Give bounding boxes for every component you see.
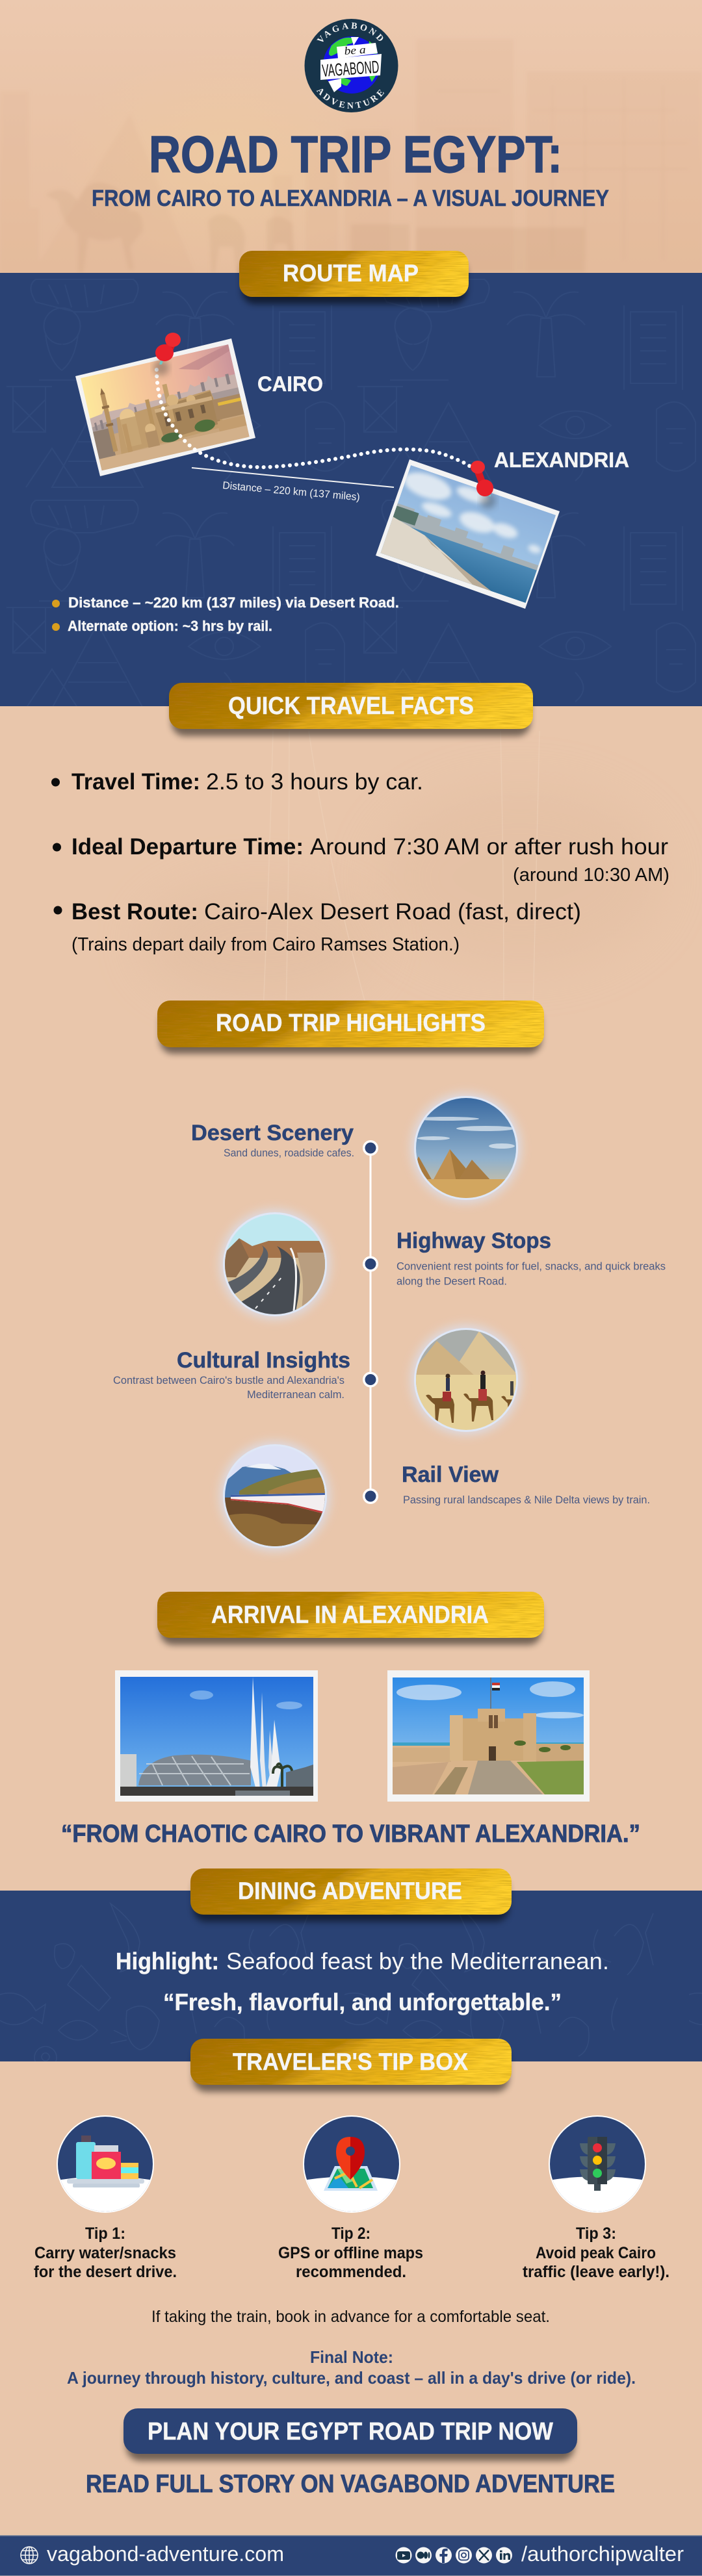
final note: A journey through history, culture, and coast – all in a day's drive (or ride). (67, 2368, 636, 2388)
subtitle: FROM CAIRO TO ALEXANDRIA – A VISUAL JOURNEY (92, 186, 609, 211)
fact: departure time: (around 10:30 AM) (513, 865, 670, 886)
icon: traffic light (549, 2115, 646, 2213)
icon: water and snacks (57, 2115, 154, 2213)
header background with faded temple and camels (0, 0, 702, 273)
photo circle: camels and pyramids (401, 1325, 528, 1435)
logo ring text (316, 22, 385, 108)
dining highlight text: Highlight: (116, 1948, 219, 1974)
quote: “FROM CHAOTIC CAIRO TO VIBRANT ALEXANDRIA.” (61, 1820, 640, 1848)
logo (304, 19, 398, 112)
heading: quick travel facts: QUICK TRAVEL FACTS (228, 693, 474, 720)
tip 1 text (34, 2225, 177, 2281)
icon: Alexandria red pin (471, 461, 496, 509)
highlight: rail view text: Passing rural landscapes & Nile Delta views by train. (403, 1494, 650, 1506)
heading: traveler's tip box: TRAVELER'S TIP BOX (233, 2048, 468, 2075)
fact: travel time: 2.5 to 3 hours by car. (206, 769, 423, 795)
tip 3 text: Avoid peak Cairo (536, 2244, 656, 2262)
highlight: rail view text (402, 1462, 650, 1506)
tip 1 text: Carry water/snacks (34, 2244, 176, 2262)
highlight: highway stops text: Highway Stops (396, 1229, 551, 1253)
tip 2 text (278, 2225, 423, 2281)
globe (323, 36, 380, 94)
route bullet list: Distance – ~220 km (137 miles) via Desert Road. (68, 594, 399, 611)
label: Alexandria: ALEXANDRIA (494, 448, 629, 472)
social icons (395, 2547, 512, 2564)
fact: best route: (Trains depart daily from Cairo Ramses Station.) (72, 934, 460, 955)
fact: best route (53, 899, 581, 955)
route: dotted path (157, 370, 471, 467)
final note (67, 2347, 636, 2388)
heading: route map (239, 251, 469, 304)
icon: globe (21, 2547, 38, 2564)
distance line and label (192, 468, 394, 503)
facts background texture (143, 731, 663, 1010)
photo: Cairo (75, 338, 255, 476)
fact: best route: Cairo-Alex Desert Road (fast, direct) (204, 899, 581, 925)
highlight: desert scenery text (191, 1121, 354, 1159)
dining highlight text: Seafood feast by the Mediterranean. (226, 1948, 609, 1974)
heading: dining adventure (190, 1868, 512, 1922)
highlight: highway stops text: Convenient rest points for fuel, snacks, and quick breaks (396, 1260, 666, 1272)
panel: dining adventure band (0, 1891, 702, 2061)
social handle: /authorchipwalter (521, 2542, 684, 2566)
panel: route map band (0, 273, 702, 706)
label: Cairo: CAIRO (257, 372, 323, 396)
heading: road trip highlights: ROAD TRIP HIGHLIGHTS (216, 1010, 486, 1037)
tip 3 text: Tip 3: (576, 2225, 616, 2243)
icon: Cairo red pin (153, 333, 181, 376)
fact: departure time (53, 834, 670, 886)
route bullet list (52, 594, 399, 634)
website: vagabond-adventure.com (47, 2542, 284, 2566)
timeline (363, 1140, 378, 1504)
tip 2 text: recommended. (296, 2263, 406, 2281)
photo: Citadel of Qaitbay (387, 1670, 590, 1802)
photo: Bibliotheca Alexandrina (115, 1670, 318, 1802)
tip 2 text: GPS or offline maps (278, 2244, 423, 2262)
highlight: highway stops text (396, 1229, 666, 1288)
logo ring text: ADVENTURE (316, 88, 385, 108)
heading: arrival in Alexandria: ARRIVAL IN ALEXANDRIA (211, 1601, 489, 1629)
logo ring text: VAGABOND (317, 22, 384, 42)
heading: traveler's tip box (190, 2039, 512, 2092)
banners: be a (344, 44, 366, 57)
fact: departure time: Ideal Departure Time: (72, 834, 304, 860)
distance line and label: Distance – 220 km (137 miles) (222, 480, 360, 503)
fact: departure time: Around 7:30 AM or after rush hour (310, 834, 668, 860)
fact: travel time (51, 769, 423, 795)
tip 1 text: for the desert drive. (34, 2263, 177, 2281)
final note: Final Note: (310, 2347, 393, 2367)
heading: dining adventure: DINING ADVENTURE (238, 1878, 462, 1904)
highlight: cultural insights text: Mediterranean calm. (247, 1388, 344, 1401)
call to action button: PLAN YOUR EGYPT ROAD TRIP NOW (148, 2418, 553, 2445)
highlight: highway stops text: along the Desert Road. (396, 1275, 507, 1288)
route bullet list: Alternate option: ~3 hrs by rail. (68, 618, 272, 634)
photo circle: train through mountains (220, 1442, 330, 1551)
highlight: cultural insights text: Cultural Insights (177, 1348, 350, 1373)
tip 3 text: traffic (leave early!). (523, 2263, 670, 2281)
tip 1 text: Tip 1: (85, 2225, 125, 2243)
dining quote: “Fresh, flavorful, and unforgettable.” (163, 1989, 562, 2015)
highlight: desert scenery text: Desert Scenery (191, 1121, 354, 1145)
heading: quick travel facts (169, 683, 533, 736)
fact: best route: Best Route: (72, 899, 198, 925)
heading: arrival in Alexandria (157, 1592, 544, 1645)
tip 2 text: Tip 2: (332, 2225, 370, 2243)
highlight: cultural insights text (113, 1348, 350, 1401)
footer bar (0, 2535, 702, 2576)
banners: VAGABOND (321, 57, 380, 81)
highlight: cultural insights text: Contrast between Cairo's bustle and Alexandria's (113, 1374, 344, 1386)
photo circle: desert highway (220, 1210, 330, 1319)
photo: Alexandria (376, 459, 560, 609)
highlight: desert scenery text: Sand dunes, roadside cafes. (224, 1147, 354, 1159)
heading: road trip highlights (157, 1001, 544, 1054)
title: ROAD TRIP EGYPT: (149, 125, 562, 183)
train note: If taking the train, book in advance for a comfortable seat. (151, 2308, 550, 2326)
icon: map pin (303, 2115, 400, 2213)
fact: travel time: Travel Time: (72, 769, 200, 795)
call to action button (124, 2408, 577, 2461)
heading: route map: ROUTE MAP (283, 260, 419, 287)
banners (320, 43, 382, 92)
highlight: rail view text: Rail View (402, 1462, 499, 1487)
read full story link: READ FULL STORY ON VAGABOND ADVENTURE (86, 2470, 615, 2498)
photo circle: pyramids under blue sky (408, 1093, 521, 1203)
tip 3 text (523, 2225, 670, 2281)
